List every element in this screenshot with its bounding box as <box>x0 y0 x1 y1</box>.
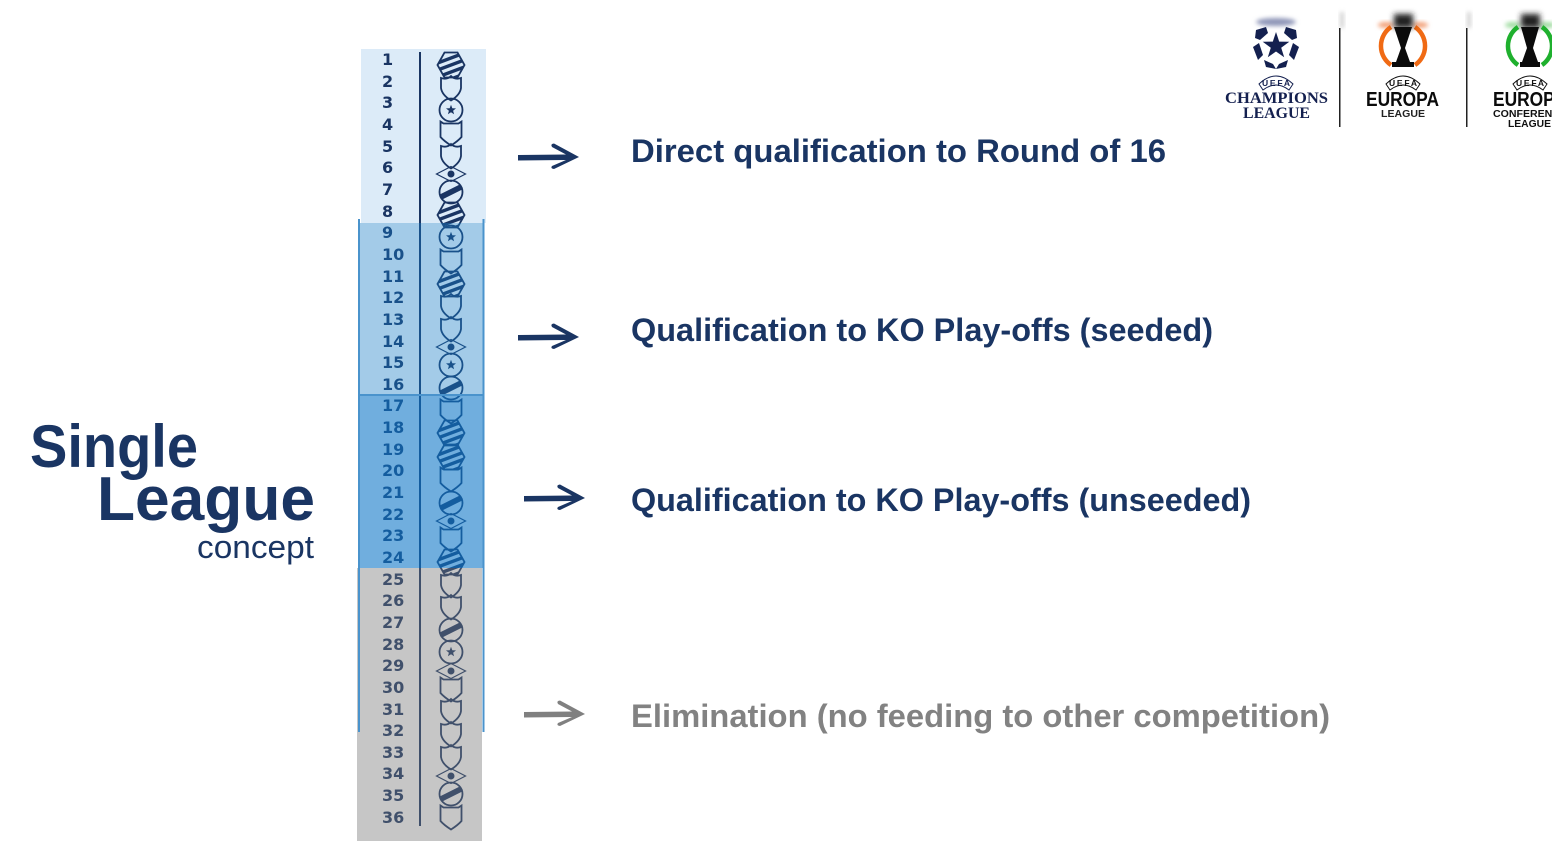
rank numbers 1 to 36: 28 <box>382 635 404 654</box>
bracket borders of qualifying bands <box>359 219 484 732</box>
rank numbers 1 to 36 <box>382 50 404 827</box>
logo: Europa League: LEAGUE <box>1381 109 1425 120</box>
arrow: top 8 <box>518 144 579 169</box>
rank numbers 1 to 36: 26 <box>382 591 404 610</box>
rank numbers 1 to 36: 30 <box>382 678 404 697</box>
rank numbers 1 to 36: 8 <box>382 202 393 221</box>
rank numbers 1 to 36: 36 <box>382 808 404 827</box>
rank numbers 1 to 36: 16 <box>382 375 404 394</box>
rank numbers 1 to 36: 34 <box>382 764 404 783</box>
rank numbers 1 to 36: 9 <box>382 223 393 242</box>
panel: league table column <box>357 49 486 841</box>
rank numbers 1 to 36: 10 <box>382 245 404 264</box>
band: ranks 25 to 36 overlay <box>357 568 482 841</box>
logo: Champions League: UEFA <box>1262 78 1290 88</box>
logo: Champions League: CHAMPIONS <box>1225 90 1328 107</box>
team badge icons <box>435 52 467 830</box>
band: top 8 background <box>361 49 486 223</box>
arrow: unseeded <box>524 484 585 510</box>
logo: Conference League: UEFA <box>1516 78 1544 88</box>
logo: Europa League: UEFA <box>1389 78 1417 88</box>
rank numbers 1 to 36: 7 <box>382 180 393 199</box>
logo: Champions League: LEAGUE <box>1243 105 1310 122</box>
rank numbers 1 to 36: 33 <box>382 743 404 762</box>
logo: Champions League <box>1225 18 1328 122</box>
rank numbers 1 to 36: 11 <box>382 267 404 286</box>
title: Single League concept: League <box>97 465 315 534</box>
rank numbers 1 to 36: 35 <box>382 786 404 805</box>
rank numbers 1 to 36: 23 <box>382 526 404 545</box>
rank numbers 1 to 36: 22 <box>382 505 404 524</box>
band: ranks 9 to 16 overlay <box>359 223 484 395</box>
title: Single League concept <box>30 413 315 565</box>
rank numbers 1 to 36: 3 <box>382 93 393 112</box>
title: Single League concept: concept <box>197 529 314 565</box>
arrow: elimination <box>524 700 585 726</box>
rank numbers 1 to 36: 15 <box>382 353 404 372</box>
heading: elimination: Elimination (no feeding to other competition) <box>631 698 1330 734</box>
heading: direct qualification: Direct qualification to Round of 16 <box>631 133 1166 169</box>
column divider line <box>419 52 421 826</box>
divider: logo separator 2 <box>1466 12 1471 127</box>
rank numbers 1 to 36: 2 <box>382 72 393 91</box>
rank numbers 1 to 36: 21 <box>382 483 404 502</box>
title: Single League concept: Single <box>30 413 198 480</box>
arrow: seeded <box>518 324 579 349</box>
rank numbers 1 to 36: 1 <box>382 50 393 69</box>
rank numbers 1 to 36: 14 <box>382 332 404 351</box>
rank numbers 1 to 36: 32 <box>382 721 404 740</box>
rank numbers 1 to 36: 20 <box>382 461 404 480</box>
rank numbers 1 to 36: 17 <box>382 396 404 415</box>
rank numbers 1 to 36: 29 <box>382 656 404 675</box>
rank numbers 1 to 36: 31 <box>382 700 404 719</box>
rank numbers 1 to 36: 6 <box>382 158 393 177</box>
heading: unseeded play-offs: Qualification to KO Play-offs (unseeded) <box>631 482 1251 518</box>
logo: Europa League <box>1366 14 1439 120</box>
rank numbers 1 to 36: 12 <box>382 288 404 307</box>
rank numbers 1 to 36: 27 <box>382 613 404 632</box>
rank numbers 1 to 36: 18 <box>382 418 404 437</box>
logo: Conference League: LEAGUE <box>1508 118 1551 130</box>
rank numbers 1 to 36: 19 <box>382 440 404 459</box>
divider: logo separator 1 <box>1339 12 1344 127</box>
logo: Conference League <box>1493 14 1552 130</box>
band: ranks 17 to 24 overlay <box>359 395 484 568</box>
rank numbers 1 to 36: 24 <box>382 548 404 567</box>
logo: Europa League: EUROPA <box>1366 89 1439 111</box>
rank numbers 1 to 36: 13 <box>382 310 404 329</box>
rank numbers 1 to 36: 25 <box>382 570 404 589</box>
heading: seeded play-offs: Qualification to KO Play-offs (seeded) <box>631 312 1213 348</box>
rank numbers 1 to 36: 5 <box>382 137 393 156</box>
rank numbers 1 to 36: 4 <box>382 115 393 134</box>
